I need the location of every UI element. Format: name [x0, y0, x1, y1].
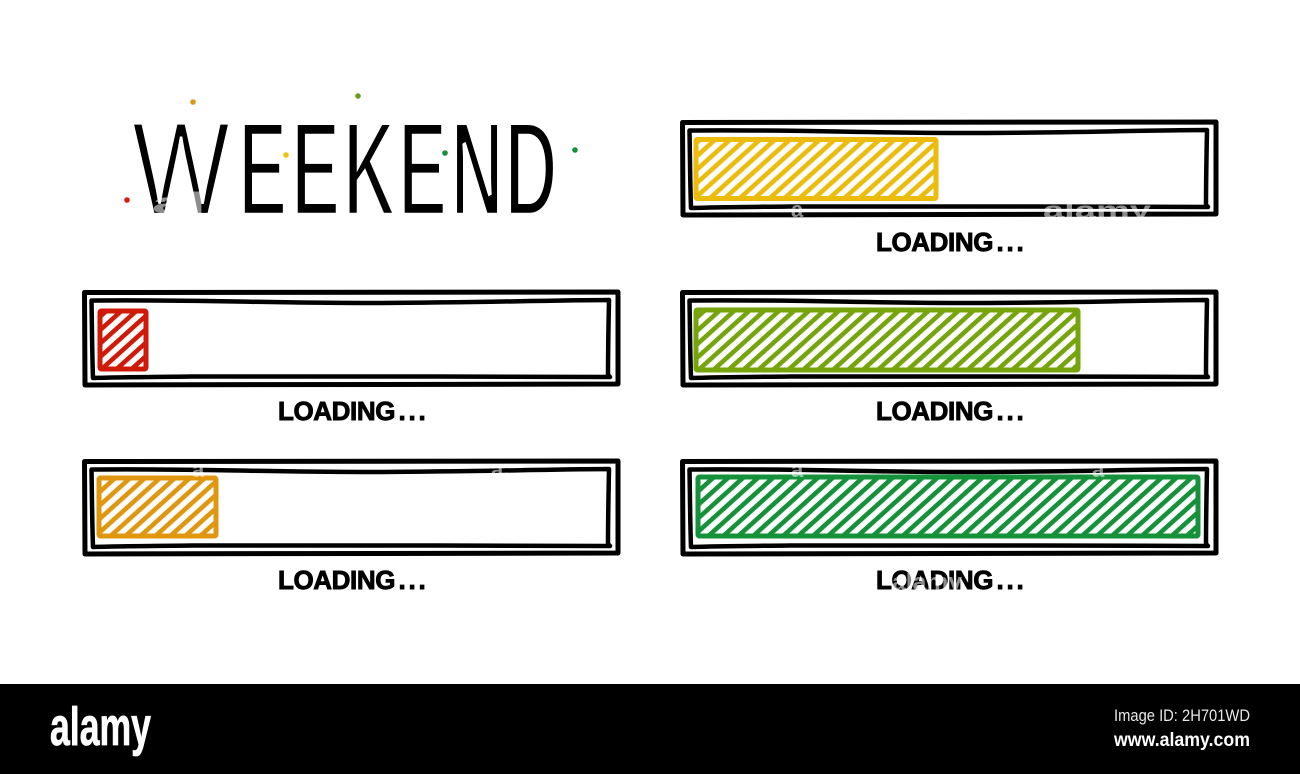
watermark marks: alamy — [892, 569, 963, 596]
watermark marks: a — [791, 197, 804, 222]
footer band — [0, 684, 1300, 774]
panel: yellow loading bar — [682, 122, 1216, 257]
panel: orange loading bar: ... — [398, 565, 425, 595]
watermark marks: a — [491, 457, 504, 482]
logo: alamy: alamy — [50, 697, 151, 757]
panel: lime loading bar: LOADING — [876, 396, 993, 426]
image id: Image ID: 2H701WD — [1114, 706, 1250, 725]
title: WEEKEND: EEKEND — [238, 93, 558, 246]
website: www.alamy.com — [1113, 730, 1250, 751]
panel: orange loading bar — [84, 461, 618, 595]
panel: red loading bar — [84, 292, 618, 426]
panel: red loading bar: LOADING — [278, 396, 395, 426]
watermark marks: al — [152, 187, 206, 220]
panel: red loading bar: ... — [398, 396, 425, 426]
panel: lime loading bar: ... — [996, 396, 1023, 426]
panel: yellow loading bar: LOADING — [876, 227, 993, 257]
watermark marks — [152, 187, 1151, 596]
title: WEEKEND: W — [132, 95, 230, 243]
panel: green loading bar: ... — [996, 565, 1023, 595]
panel: green loading bar — [682, 461, 1216, 595]
watermark marks: alamy — [1043, 197, 1151, 223]
panel: yellow loading bar: ... — [996, 227, 1023, 257]
watermark marks: a — [192, 457, 205, 482]
confetti dots — [124, 93, 578, 203]
panel: orange loading bar: LOADING — [278, 565, 395, 595]
panel: lime loading bar — [682, 292, 1216, 426]
panel: green loading bar: LOADING — [876, 565, 993, 595]
watermark marks: a — [1092, 457, 1105, 482]
watermark marks: a — [791, 457, 804, 482]
